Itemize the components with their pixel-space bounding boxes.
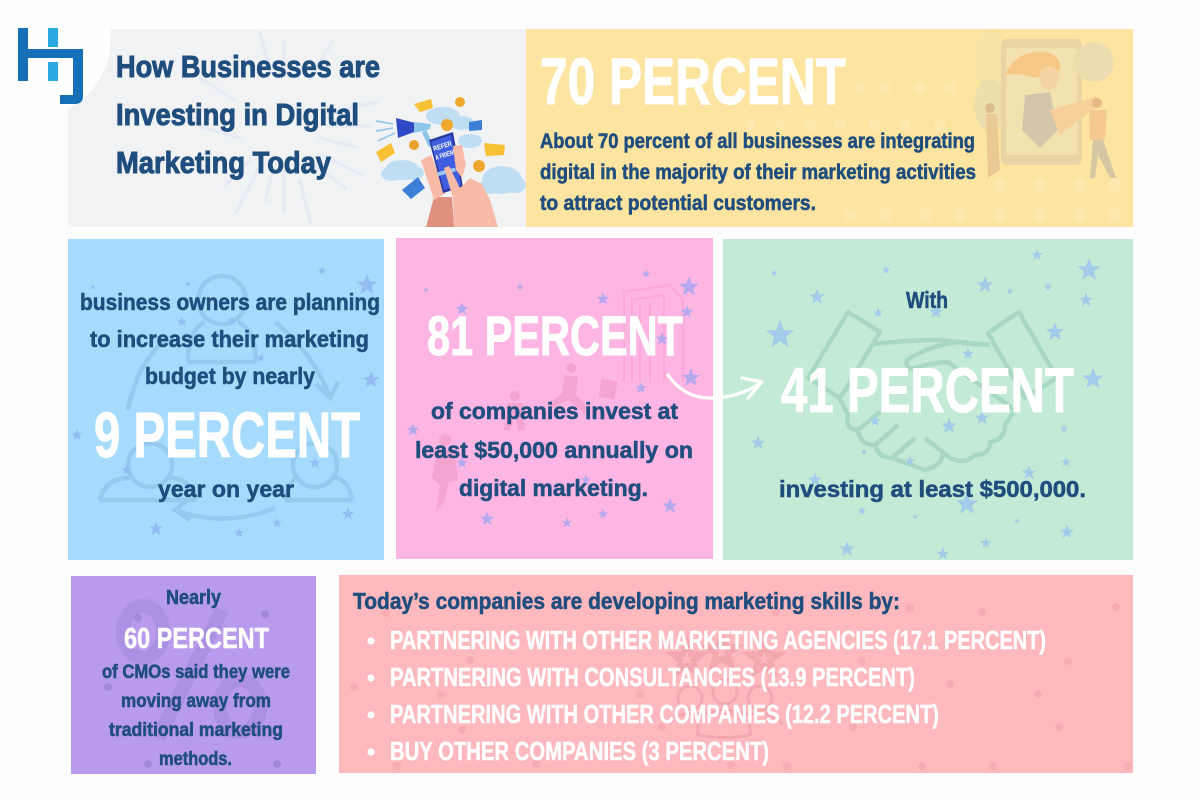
body text: CMOs: traditional marketing — [109, 720, 283, 741]
icon: people cycle — [100, 276, 352, 520]
title: How Businesses are — [116, 49, 380, 84]
panel: 41 percent — [723, 239, 1133, 560]
panel: 70 percent — [526, 29, 1133, 227]
body text: budget plans: business owners are planning — [80, 289, 380, 315]
body text: CMOs: methods. — [159, 749, 232, 770]
body text: CMOs: of CMOs said they were — [102, 662, 290, 683]
paragraph: to attract potential customers. — [540, 192, 816, 215]
star pattern — [407, 270, 700, 527]
big figure: 70 percent: 70 PERCENT — [540, 44, 846, 118]
body text: company investment: of companies invest at — [431, 398, 678, 424]
arrow: 81 percent to 41 percent — [668, 375, 762, 398]
dot pattern — [104, 610, 281, 768]
big figure: 9 percent: 9 PERCENT — [94, 399, 360, 471]
title — [116, 49, 380, 180]
title: Marketing Today — [116, 145, 332, 180]
big figure: 81 percent: 81 PERCENT — [427, 304, 683, 367]
panel: marketing skills — [339, 575, 1133, 773]
bullet list — [367, 625, 1046, 766]
bullet list: PARTNERING WITH CONSULTANCIES (13.9 PERCENT) — [390, 662, 915, 692]
body text: budget plans: to increase their marketing — [90, 326, 369, 352]
body text: company investment: digital marketing. — [459, 475, 648, 501]
illustration: phone with woman and people — [974, 30, 1116, 178]
paragraph — [540, 130, 976, 215]
caption: year on year: year on year — [158, 476, 294, 502]
bullet list: BUY OTHER COMPANIES (3 PERCENT) — [390, 736, 769, 766]
body text: CMOs — [102, 662, 290, 770]
star pattern — [751, 249, 1104, 559]
panel: 9 percent — [68, 239, 384, 560]
body text: company investment: least $50,000 annually on — [415, 437, 693, 463]
illustration: phone in hands with megaphone: A FRIEND — [435, 149, 458, 162]
panel: 81 percent — [396, 238, 713, 559]
paragraph: About 70 percent of all businesses are integrating — [540, 130, 975, 153]
panel: header title — [68, 29, 526, 227]
icon: handshake — [808, 312, 1057, 470]
panel: 60 percent — [71, 576, 316, 774]
dot pattern — [745, 82, 1122, 222]
big figure: 60 percent: 60 PERCENT — [124, 623, 269, 655]
heading: Today’s companies are developing marketing skills by: — [353, 588, 900, 614]
illustration: phone in hands with megaphone — [376, 97, 526, 227]
logo mark: HJ — [18, 28, 83, 104]
lead-in: nearly: Nearly — [166, 587, 222, 609]
dot pattern — [350, 603, 1132, 770]
big figure: 41 percent: 41 PERCENT — [781, 356, 1074, 426]
paragraph: digital in the majority of their marketing activities — [540, 161, 976, 184]
icon: percent sign — [123, 606, 260, 738]
lead-in: with: With — [906, 287, 948, 313]
bullet list: PARTNERING WITH OTHER COMPANIES (12.2 PERCENT) — [390, 699, 939, 729]
phone screen text: REFER — [433, 141, 453, 153]
body text: budget plans: budget by nearly — [145, 363, 315, 389]
caption: investing at least: investing at least $500,000. — [779, 476, 1086, 502]
body text: CMOs: moving away from — [121, 691, 271, 712]
title: Investing in Digital — [116, 97, 359, 132]
star pattern — [71, 266, 380, 537]
body text: company investment — [415, 398, 693, 501]
body text: budget plans — [80, 289, 380, 389]
illustration: door and running people — [432, 285, 683, 512]
icon: team with stars — [668, 637, 782, 738]
logo badge — [0, 0, 111, 119]
sunburst decoration — [200, 32, 376, 222]
